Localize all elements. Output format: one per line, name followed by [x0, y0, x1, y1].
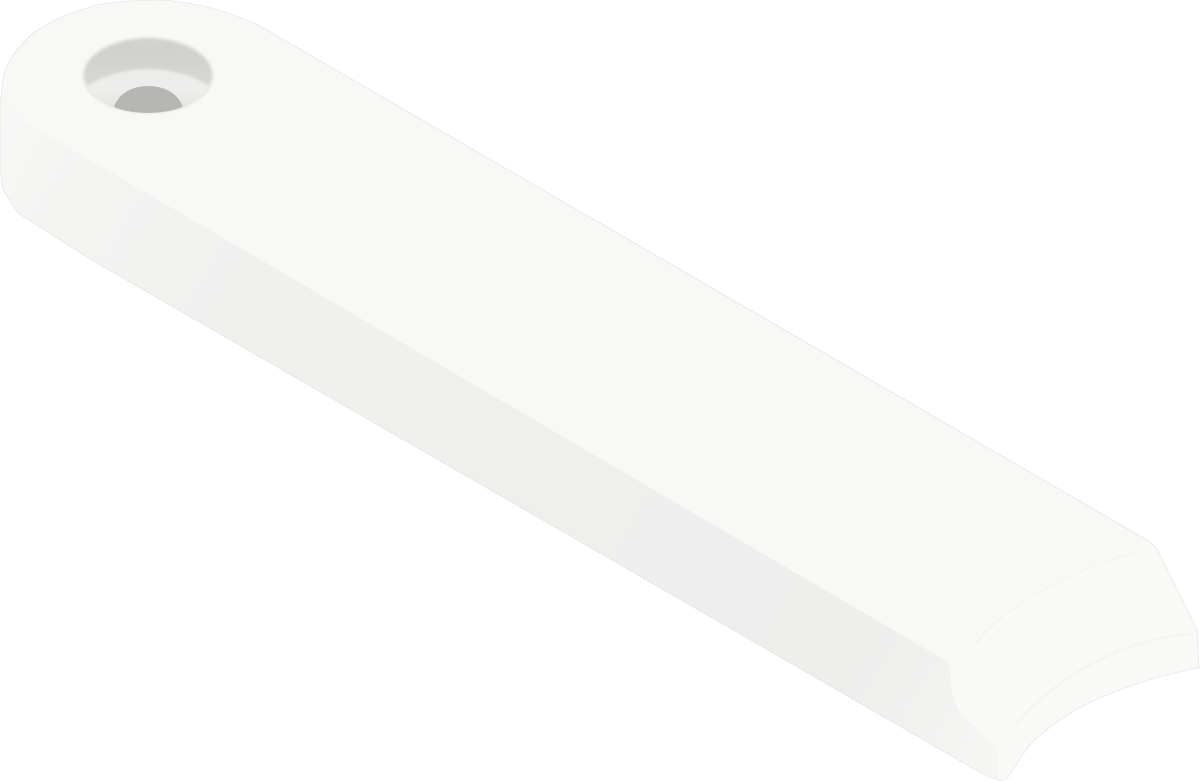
icon: counterbored screw hole: [84, 38, 212, 116]
counterbore floor: [88, 68, 208, 105]
counterbore wall: [84, 38, 212, 113]
upper curved crease: [975, 553, 1132, 645]
end face: curved lip: [950, 540, 1199, 780]
through hole: [114, 86, 183, 114]
side face: [0, 80, 1028, 781]
lower curved crease: [1016, 634, 1190, 725]
